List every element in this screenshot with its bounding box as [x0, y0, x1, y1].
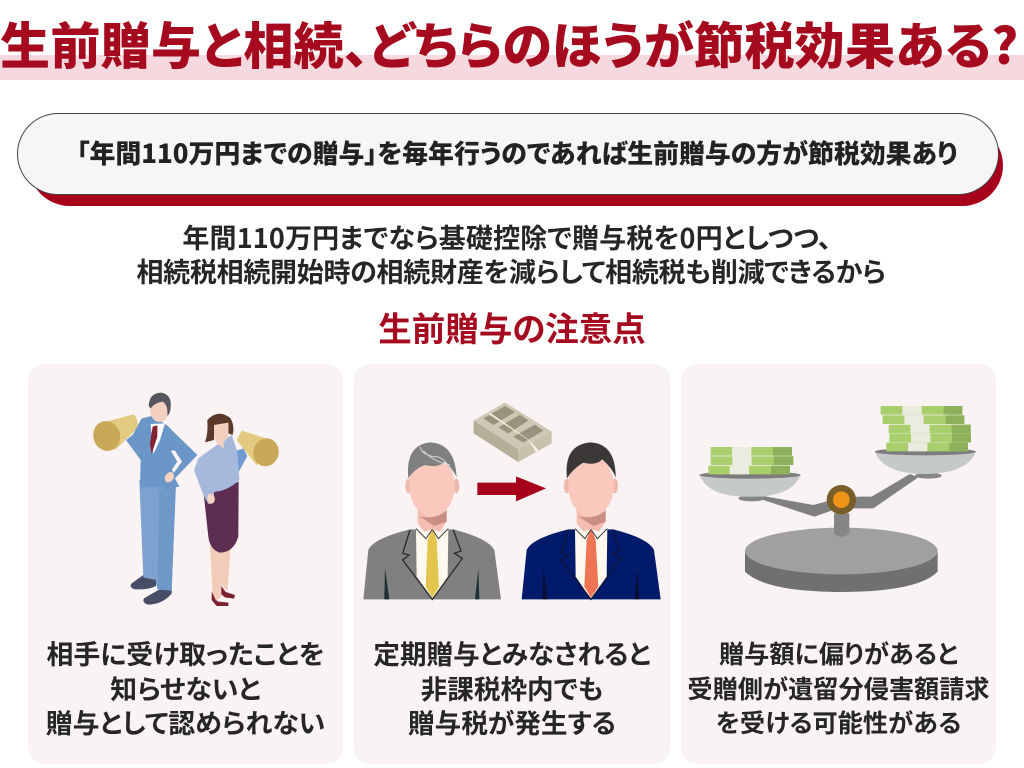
arrow: [477, 476, 546, 501]
title: 生前贈与と相続、どちらのほうが節税効果ある?: [0, 7, 1019, 79]
caption: notify recipient: [46, 633, 325, 741]
pill text: 「年間110万円までの贈与」を毎年行うのであれば生前贈与の方が節税効果あり: [76, 134, 958, 171]
right pan: [875, 448, 976, 479]
caption: uneven gift: 贈与額に偏りがあると: [719, 635, 958, 671]
caption: notify recipient: 知らせないと: [110, 668, 261, 706]
icon: unbalanced scale with money: [699, 406, 976, 592]
caption: uneven gift: を受ける可能性がある: [716, 704, 961, 740]
caption: uneven gift: [687, 635, 990, 740]
caption: regular gift: [373, 633, 651, 741]
panel: uneven gift: [681, 364, 996, 764]
man: [126, 393, 197, 605]
older man: [363, 442, 501, 599]
money stack: [474, 403, 552, 462]
pill shadow: [29, 125, 1003, 206]
explanation text: 相続税相続開始時の相続財産を減らして相続税も削減できるから: [136, 250, 886, 290]
section heading: 生前贈与の注意点: [378, 302, 646, 351]
scale beam: [763, 474, 918, 517]
right megaphone: [237, 431, 282, 469]
woman: [194, 414, 247, 606]
explanation text: 年間110万円までなら基礎控除で贈与税を0円としつつ、: [182, 217, 832, 256]
caption: regular gift: 贈与税が発生する: [408, 702, 616, 741]
caption: notify recipient: 贈与として認められない: [46, 702, 325, 741]
panel: notify recipient: [28, 364, 343, 764]
scale base: [745, 513, 938, 592]
right money stack: [881, 406, 971, 451]
caption: regular gift: 定期贈与とみなされると: [373, 633, 651, 672]
scale pivot: [827, 485, 856, 514]
icon: gift from older man to younger man: [363, 403, 661, 599]
title band: [0, 55, 1024, 80]
explanation text: [136, 217, 886, 290]
icon: man and woman with megaphones: [90, 393, 282, 606]
panel: regular gift: [354, 364, 670, 764]
left megaphone: [90, 414, 138, 454]
caption: regular gift: 非課税枠内でも: [421, 668, 603, 706]
caption: uneven gift: 受贈側が遺留分侵害額請求: [687, 670, 990, 706]
younger man: [522, 442, 661, 599]
left money stack: [708, 447, 793, 474]
callout pill: [17, 113, 1003, 206]
left pan: [699, 471, 801, 501]
pill face: [17, 113, 999, 195]
caption: notify recipient: 相手に受け取ったことを: [46, 633, 325, 672]
